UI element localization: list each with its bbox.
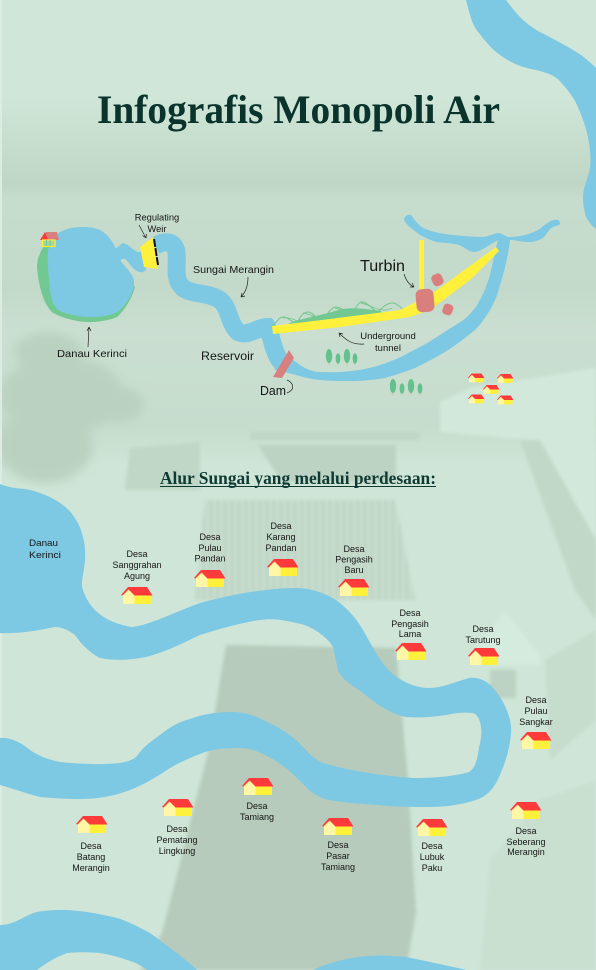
schematic labels: Underground [360, 331, 416, 342]
village: Desa Pulau Sangkar: Desa [525, 695, 547, 705]
village: Desa Pasar Tamiang: Tamiang [321, 862, 355, 872]
dam [273, 350, 294, 378]
village: Desa Pematang Lingkung: Pematang [156, 835, 198, 845]
village: Desa Pulau Pandan: Pulau [198, 543, 222, 553]
village: Desa Pengasih Baru [335, 544, 373, 596]
village: Desa Pengasih Lama: Pengasih [391, 619, 429, 629]
village: Desa Batang Merangin [72, 816, 110, 873]
village: Desa Pulau Sangkar: Sangkar [519, 717, 553, 727]
village: Desa Pulau Pandan [194, 532, 226, 587]
village: Desa Pematang Lingkung: Desa [166, 824, 188, 834]
regulating weir [140, 237, 158, 269]
schematic: Danau Kerinci lake [37, 227, 146, 322]
river: lower edge bottom centre [313, 956, 466, 970]
lake water [48, 227, 146, 317]
village: Desa Karang Pandan: Karang [266, 532, 296, 542]
village: Desa Karang Pandan: Desa [270, 521, 292, 531]
village: Desa Karang Pandan [265, 521, 298, 576]
village: Desa Pematang Lingkung: Lingkung [159, 846, 195, 856]
green hills above tunnel [272, 302, 404, 326]
trees group 1 [326, 349, 357, 365]
village: Desa Seberang Merangin: Merangin [507, 847, 545, 857]
label: Danau Kerinci: Danau [29, 538, 58, 549]
village: Desa Batang Merangin: Batang [77, 852, 105, 862]
village: Desa Pengasih Lama [391, 608, 429, 660]
village: Desa Pematang Lingkung [156, 799, 198, 856]
village: Desa Pulau Sangkar [519, 695, 553, 749]
village: Desa Batang Merangin: Merangin [72, 863, 110, 873]
village: Desa Tamiang [240, 778, 274, 822]
village: Desa Pengasih Baru: Baru [344, 565, 364, 575]
schematic: Sungai Merangin river [155, 215, 560, 381]
village: Desa Tarutung: Desa [472, 624, 494, 634]
village: Desa Tamiang: Desa [246, 801, 268, 811]
village: Desa Pengasih Lama: Desa [399, 608, 421, 618]
river: top right corner [466, 0, 596, 229]
river: lower map main course [0, 484, 511, 807]
village: Desa Sanggrahan Agung: Desa [126, 549, 148, 559]
village: Desa Lubuk Paku: Paku [422, 863, 442, 873]
schematic labels: Sungai Merangin [193, 264, 274, 276]
small village houses [468, 374, 513, 404]
village: Desa Pulau Pandan: Desa [199, 532, 221, 542]
village: Desa Sanggrahan Agung [112, 549, 162, 604]
schematic labels: Regulating [135, 212, 179, 222]
river: lower edge bottom left [0, 910, 197, 970]
village: Desa Lubuk Paku [416, 819, 448, 873]
village: Desa Tarutung: Tarutung [465, 635, 501, 645]
village: Desa Seberang Merangin: Seberang [506, 837, 546, 847]
village: Desa Sanggrahan Agung: Sanggrahan [112, 560, 162, 570]
turbine [415, 272, 454, 316]
village: Desa Tarutung [465, 624, 501, 665]
schematic labels: Dam [260, 384, 286, 398]
village: Desa Seberang Merangin: Desa [515, 826, 537, 836]
village: Desa Batang Merangin: Desa [80, 841, 102, 851]
schematic labels: Turbin [360, 258, 405, 275]
village: Desa Pengasih Baru: Desa [343, 544, 365, 554]
title: Infografis Monopoli Air [97, 87, 500, 132]
trees group 2 [390, 379, 422, 395]
village: Desa Lubuk Paku: Desa [421, 841, 443, 851]
village: Desa Pasar Tamiang: Pasar [326, 851, 350, 861]
schematic labels: tunnel [375, 343, 401, 354]
village: Desa Pulau Pandan: Pandan [194, 554, 226, 564]
label: Danau Kerinci: Kerinci [29, 550, 61, 561]
underground tunnel [272, 240, 499, 334]
village: Desa Lubuk Paku: Lubuk [420, 852, 445, 862]
village: Desa Sanggrahan Agung: Agung [124, 571, 150, 581]
village: Desa Tamiang: Tamiang [240, 812, 274, 822]
schematic labels [57, 212, 416, 398]
section heading: Alur Sungai yang melalui perdesaan: [160, 468, 436, 488]
village: Desa Pasar Tamiang: Desa [327, 840, 349, 850]
village: Desa Pulau Sangkar: Pulau [524, 706, 548, 716]
annotation arrows [87, 225, 414, 393]
village: Desa Pengasih Lama: Lama [399, 629, 421, 639]
small house at lake [40, 232, 59, 246]
village: Desa Pasar Tamiang [321, 818, 355, 872]
village: Desa Karang Pandan: Pandan [265, 543, 297, 553]
schematic labels: Danau Kerinci [57, 348, 127, 360]
schematic labels: Weir [148, 224, 166, 234]
village: Desa Pengasih Baru: Pengasih [335, 554, 373, 564]
lake shore green crescent [37, 232, 135, 322]
schematic labels: Reservoir [201, 349, 254, 363]
village: Desa Seberang Merangin [506, 802, 546, 857]
label: Danau Kerinci [29, 538, 61, 561]
